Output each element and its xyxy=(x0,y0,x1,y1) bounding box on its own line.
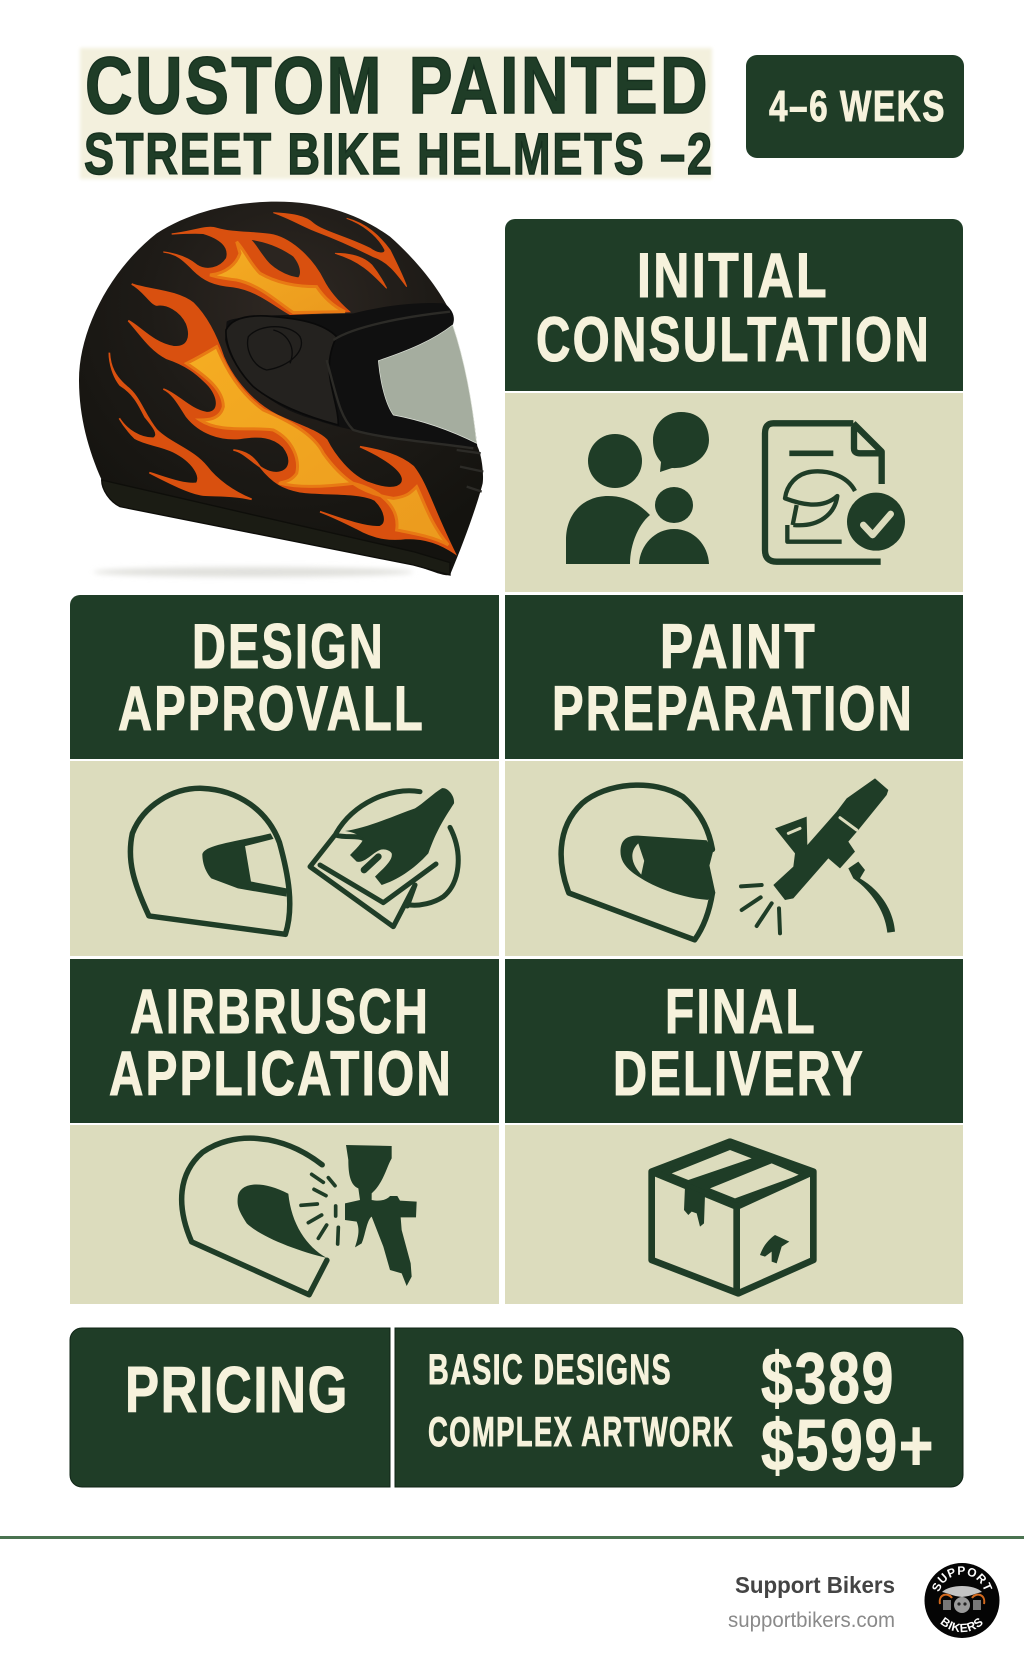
title: STREET BIKE HELMETS –2 xyxy=(84,122,714,187)
flame: top right xyxy=(273,213,407,288)
header: final delivery xyxy=(505,959,963,1123)
icon: parcel box xyxy=(652,1142,813,1293)
complex artwork price: COMPLEX ARTWORK xyxy=(428,1408,734,1455)
complex artwork price: $599+ xyxy=(761,1406,935,1486)
header: design approval: APPROVALL xyxy=(118,674,425,744)
title xyxy=(80,41,714,187)
header: design approval xyxy=(70,595,499,759)
panel: initial consultation xyxy=(505,219,963,592)
icon: spray gun xyxy=(301,1145,417,1286)
header: airbrush application: AIRBRUSCH xyxy=(130,977,430,1047)
helmet photo xyxy=(79,202,483,577)
icon: helmet xyxy=(182,1138,327,1295)
header: initial consultation: INITIAL xyxy=(637,241,829,311)
flame: upper xyxy=(163,227,349,314)
logo badge: BIKERS xyxy=(940,1617,982,1632)
complex artwork price xyxy=(428,1406,935,1486)
panel: airbrush application xyxy=(70,959,499,1304)
header: airbrush application: APPLICATION xyxy=(109,1039,453,1109)
panel: paint preparation xyxy=(505,595,963,956)
flame: main xyxy=(128,284,455,553)
basic designs price xyxy=(428,1339,895,1419)
header: final delivery: FINAL xyxy=(665,977,817,1047)
icon: helmet outline xyxy=(130,788,290,934)
footer brand text: Support Bikers xyxy=(735,1572,895,1598)
basic designs price: BASIC DESIGNS xyxy=(428,1346,672,1394)
helmet face port xyxy=(225,303,477,447)
header: paint preparation xyxy=(505,595,963,759)
header: initial consultation xyxy=(505,219,963,391)
footer brand text xyxy=(728,1572,895,1632)
panel: final delivery xyxy=(505,959,963,1304)
panel: pricing label xyxy=(70,1328,390,1487)
duration badge xyxy=(746,55,964,158)
header: paint preparation: PAINT xyxy=(660,612,817,682)
logo badge xyxy=(924,1563,1000,1638)
basic designs price: $389 xyxy=(761,1339,895,1419)
icon: document with helmet and check xyxy=(765,423,905,562)
logo badge: SUPPORT xyxy=(932,1566,992,1592)
panel: design approval xyxy=(70,595,499,956)
icon: people with speech bubble xyxy=(566,412,709,564)
header: final delivery: DELIVERY xyxy=(613,1039,865,1109)
flame: lower left xyxy=(109,353,252,499)
header: airbrush application xyxy=(70,959,499,1123)
icon: hand with cloth xyxy=(310,788,458,927)
header: paint preparation: PREPARATION xyxy=(552,674,914,744)
title: CUSTOM PAINTED xyxy=(85,41,710,131)
panel: pricing values xyxy=(395,1328,963,1487)
footer brand text: supportbikers.com xyxy=(728,1609,895,1632)
helmet cheek pad xyxy=(226,316,338,425)
header: design approval: DESIGN xyxy=(192,612,385,682)
panel: pricing label: PRICING xyxy=(125,1353,349,1426)
icon: airbrush with spray xyxy=(741,778,895,933)
icon: helmet xyxy=(561,785,715,940)
helmet visor xyxy=(378,325,477,443)
duration badge: 4–6 WEKS xyxy=(769,82,946,131)
helmet rim xyxy=(102,480,450,575)
